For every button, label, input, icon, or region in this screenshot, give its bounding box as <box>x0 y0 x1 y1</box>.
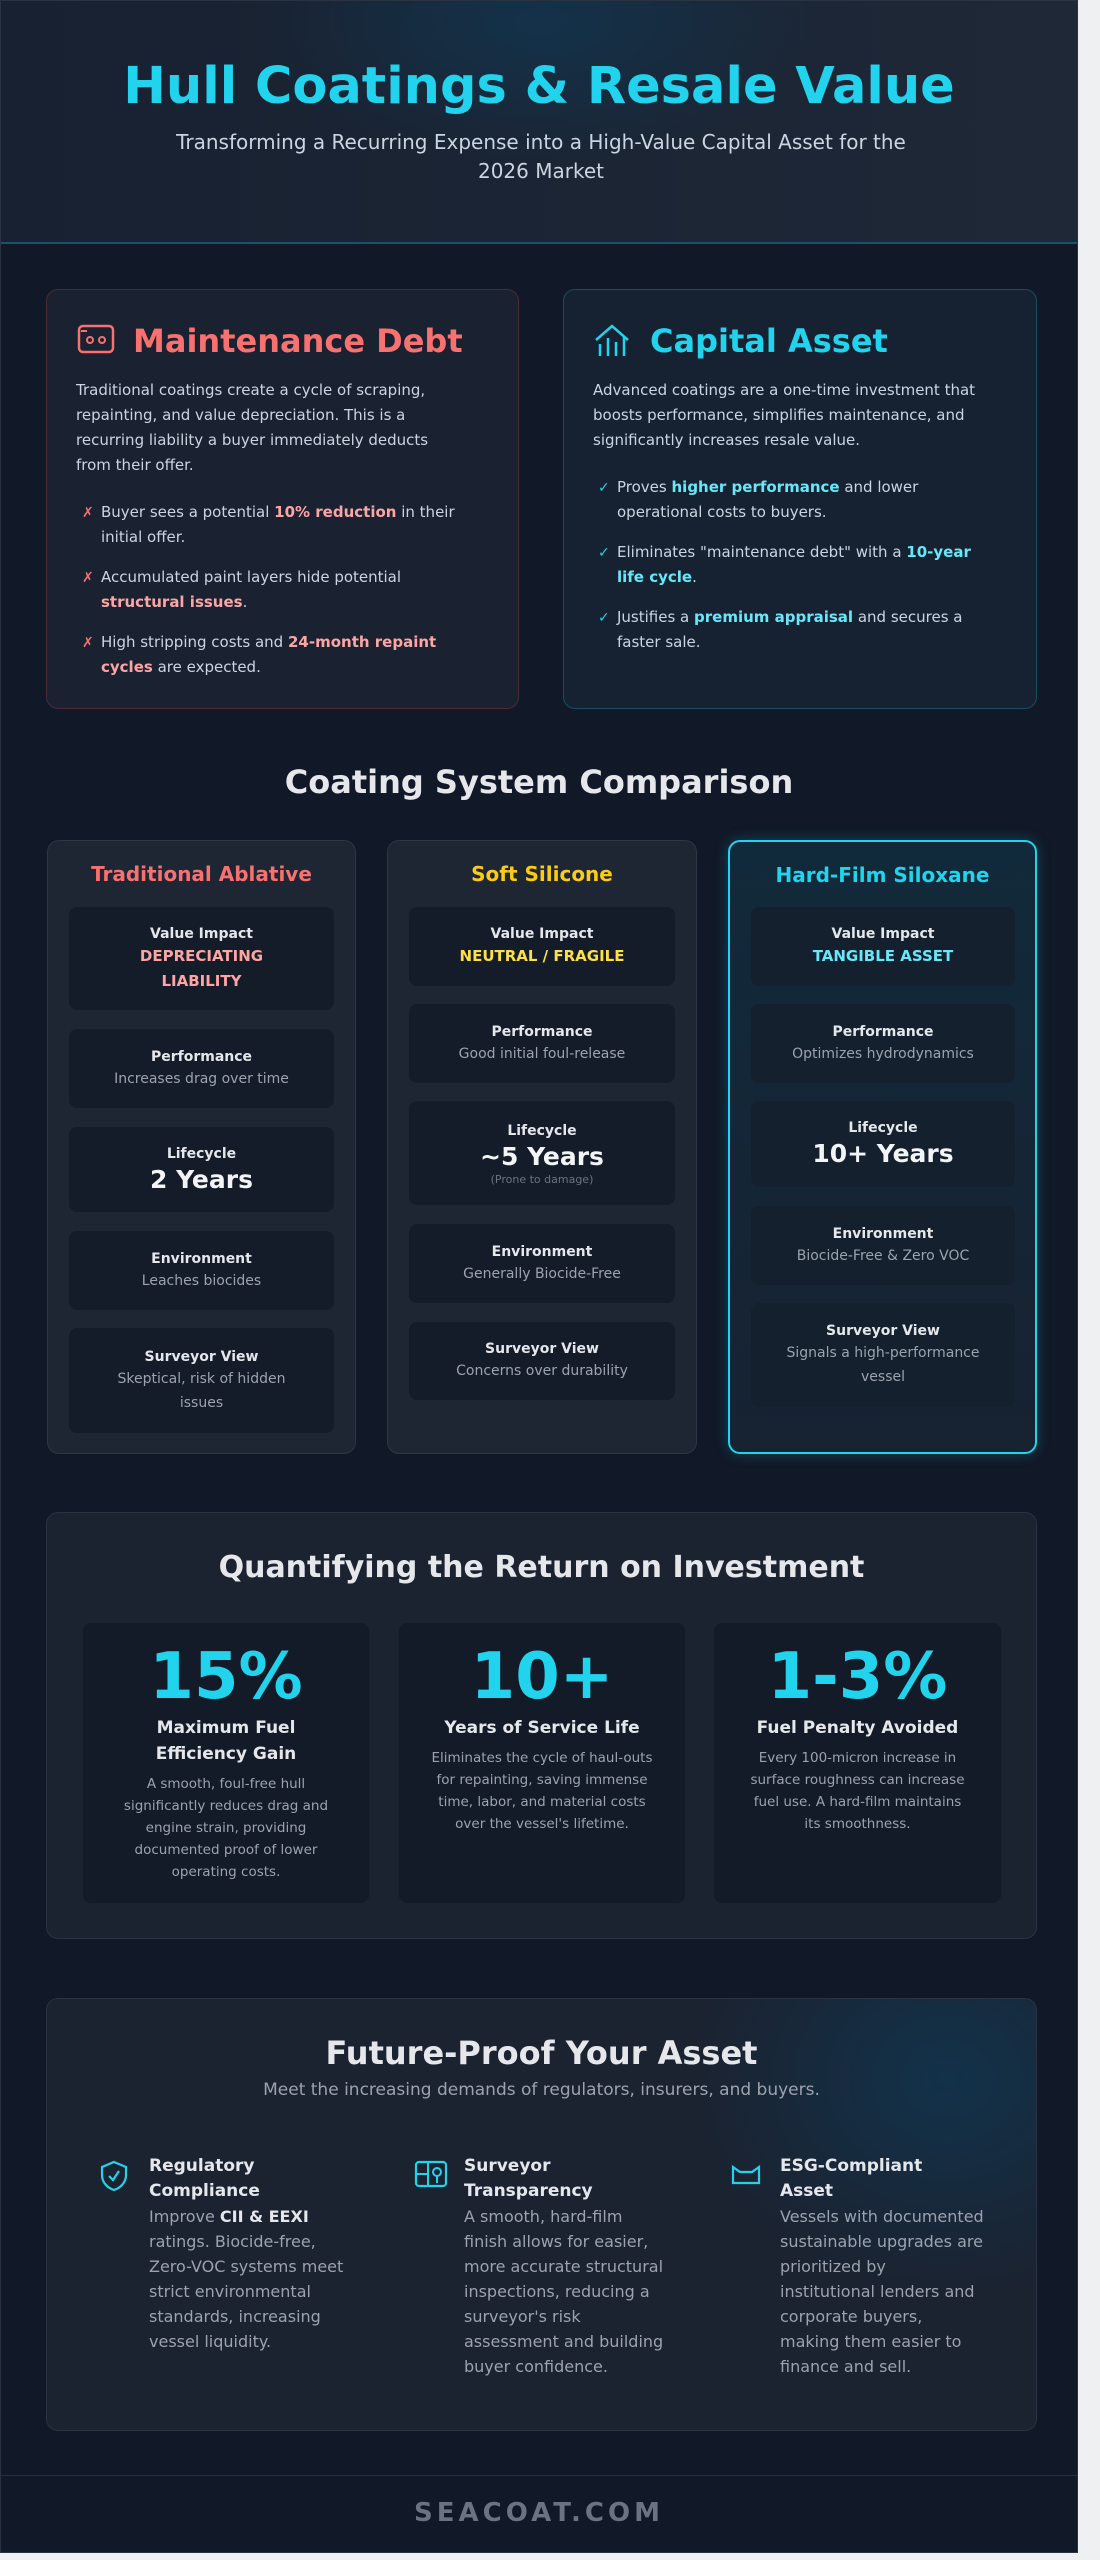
heading: Maintenance Debt <box>133 322 463 360</box>
heading: Future-Proof Your Asset <box>326 2034 757 2072</box>
stat: 1-3% <box>714 1623 1001 1903</box>
stat: 10+: 10+ <box>471 1640 613 1714</box>
panel: traditional ablative: Value Impact <box>150 926 253 942</box>
stat: 15%: Efficiency Gain <box>156 1744 296 1764</box>
heading: comparison: Coating System Comparison <box>285 763 793 801</box>
text block: Traditional coatings create a cycle of scraping, repainting, and value depreciation. This is a recurring liability a buyer immediately deducts from their offer. <box>76 381 428 474</box>
stat: 1-3%: Every 100-micron increase in surface roughness can increase fuel use. A hard-film maintains its smoothness. <box>750 1750 965 1832</box>
panel: hard-film siloxane <box>728 840 1037 1454</box>
item: esg: ESG-Compliant <box>780 2156 922 2176</box>
panel: traditional ablative: 2 Years <box>150 1164 253 1194</box>
panel: soft silicone <box>387 840 697 1454</box>
panel: soft silicone: Good initial foul-release <box>459 1046 625 1062</box>
item: surveyor: Surveyor Transparency <box>464 2156 593 2201</box>
item: esg <box>732 2156 984 2376</box>
panel: hard-film siloxane: Surveyor View <box>826 1323 940 1339</box>
panel: traditional ablative: Environment <box>151 1250 252 1266</box>
bullets: Buyer sees a potential 10% reduction in their initial offer. <box>101 503 455 546</box>
panel: hard-film siloxane: Environment <box>833 1226 933 1242</box>
panel: hard-film siloxane: Optimizes hydrodynamics <box>792 1046 974 1062</box>
panel: soft silicone: Soft Silicone <box>471 862 613 886</box>
panel: traditional ablative: DEPRECIATING <box>140 946 263 964</box>
bullets: Accumulated paint layers hide potential structural issues. <box>101 568 401 611</box>
panel: capital asset: ✓ <box>598 610 610 626</box>
bullets: Justifies a premium appraisal and secures a faster sale. <box>617 608 962 651</box>
icon: leaf tray <box>732 2165 760 2184</box>
panel: maintenance debt <box>46 289 519 709</box>
panel: soft silicone: Lifecycle <box>507 1122 577 1138</box>
panel: ROI <box>46 1512 1037 1939</box>
item: esg: Asset <box>780 2181 833 2201</box>
item: surveyor: A smooth, hard-film finish allows for easier, more accurate structural inspections, reducing a surveyor's risk assessment and building buyer confidence. <box>464 2207 663 2376</box>
panel: traditional ablative <box>47 840 356 1454</box>
panel: hard-film siloxane: TANGIBLE ASSET <box>813 947 953 965</box>
stat: 15%: A smooth, foul-free hull significantly reduces drag and engine strain, providing documented proof of lower operating costs. <box>124 1776 328 1880</box>
item: surveyor <box>414 2156 663 2376</box>
panel: future-proof <box>46 1998 1037 2431</box>
panel: traditional ablative: Performance <box>151 1048 252 1064</box>
panel: soft silicone: Value Impact <box>491 926 593 942</box>
panel: hard-film siloxane: Value Impact <box>832 926 934 942</box>
stat: 10+: Eliminates the cycle of haul-outs for repainting, saving immense time, labor, and material costs over the vessel's lifetime. <box>431 1750 653 1832</box>
panel: hard-film siloxane: Signals a high-performance vessel <box>786 1345 980 1385</box>
panel: soft silicone: Environment <box>492 1244 592 1260</box>
panel: traditional ablative: Lifecycle <box>167 1146 236 1162</box>
panel: traditional ablative: Skeptical, risk of hidden issues <box>118 1370 285 1410</box>
item: regulatory: Regulatory Compliance <box>149 2156 260 2201</box>
icon: wallet <box>78 324 114 354</box>
bullets: Proves higher performance and lower operational costs to buyers. <box>617 478 918 521</box>
panel: traditional ablative: Leaches biocides <box>142 1272 261 1288</box>
panel: capital asset <box>563 289 1037 709</box>
stat: 1-3%: Fuel Penalty Avoided <box>757 1718 958 1738</box>
panel: hard-film siloxane: Performance <box>832 1024 934 1040</box>
panel: maintenance debt: ✗ <box>82 505 94 521</box>
item: regulatory <box>100 2156 343 2351</box>
panel: traditional ablative: Surveyor View <box>145 1348 258 1364</box>
subtitle: Meet the increasing demands of regulators, insurers, and buyers. <box>263 2080 820 2100</box>
heading: Quantifying the Return on Investment <box>219 1550 864 1585</box>
footer: SEACOAT.COM <box>414 2498 664 2528</box>
panel: hard-film siloxane: Biocide-Free & Zero VOC <box>797 1248 969 1264</box>
panel: traditional ablative: LIABILITY <box>161 972 241 990</box>
panel: soft silicone: ~5 Years <box>480 1142 604 1170</box>
panel: soft silicone: Surveyor View <box>485 1341 599 1357</box>
panel: capital asset: ✓ <box>598 480 610 496</box>
item: esg: Vessels with documented sustainable upgrades are prioritized by institutional lenders and corporate buyers, making them easier to finance and sell. <box>780 2207 984 2376</box>
panel: capital asset: ✓ <box>598 545 610 561</box>
icon: growth <box>595 324 629 356</box>
bullets <box>598 478 971 651</box>
panel: maintenance debt: ✗ <box>82 570 94 586</box>
stat: 1-3%: 1-3% <box>768 1640 947 1714</box>
panel: hard-film siloxane: 10+ Years <box>812 1139 954 1168</box>
panel: traditional ablative: Increases drag over time <box>114 1070 289 1086</box>
stat: 10+ <box>399 1623 685 1903</box>
header <box>1 1 1077 244</box>
title: Hull Coatings & Resale Value <box>123 57 955 116</box>
stat: 10+: Years of Service Life <box>444 1718 640 1738</box>
panel: soft silicone: (Prone to damage) <box>491 1172 593 1186</box>
panel: soft silicone: NEUTRAL / FRAGILE <box>460 947 624 965</box>
text block: Advanced coatings are a one-time investment that boosts performance, simplifies maintenance, and significantly increases resale value. <box>593 381 975 449</box>
panel: hard-film siloxane: Lifecycle <box>848 1120 918 1136</box>
bullets: Eliminates "maintenance debt" with a 10-year life cycle. <box>617 543 971 586</box>
footer <box>1 2475 1077 2553</box>
panel: soft silicone: Generally Biocide-Free <box>463 1266 621 1282</box>
subtitle: Transforming a Recurring Expense into a High-Value Capital Asset for the 2026 Market <box>176 130 906 183</box>
stat: 15%: Maximum Fuel <box>157 1718 295 1738</box>
panel: soft silicone: Concerns over durability <box>456 1363 628 1379</box>
panel: hard-film siloxane: Hard-Film Siloxane <box>776 863 989 887</box>
stat: 15%: 15% <box>149 1640 303 1714</box>
panel: soft silicone: Performance <box>491 1024 593 1040</box>
panel: traditional ablative: Traditional Ablative <box>91 862 312 886</box>
stat: 15% <box>83 1623 369 1903</box>
bullets <box>82 503 455 676</box>
icon: inspection <box>414 2160 448 2188</box>
icon: shield <box>100 2160 128 2192</box>
bullets: High stripping costs and 24-month repaint cycles are expected. <box>101 633 436 676</box>
heading: Capital Asset <box>650 322 888 360</box>
panel: maintenance debt: ✗ <box>82 635 94 651</box>
item: regulatory: Improve CII & EEXI ratings. Biocide-free, Zero-VOC systems meet strict environmental standards, increasing vessel liquidity. <box>149 2207 343 2351</box>
